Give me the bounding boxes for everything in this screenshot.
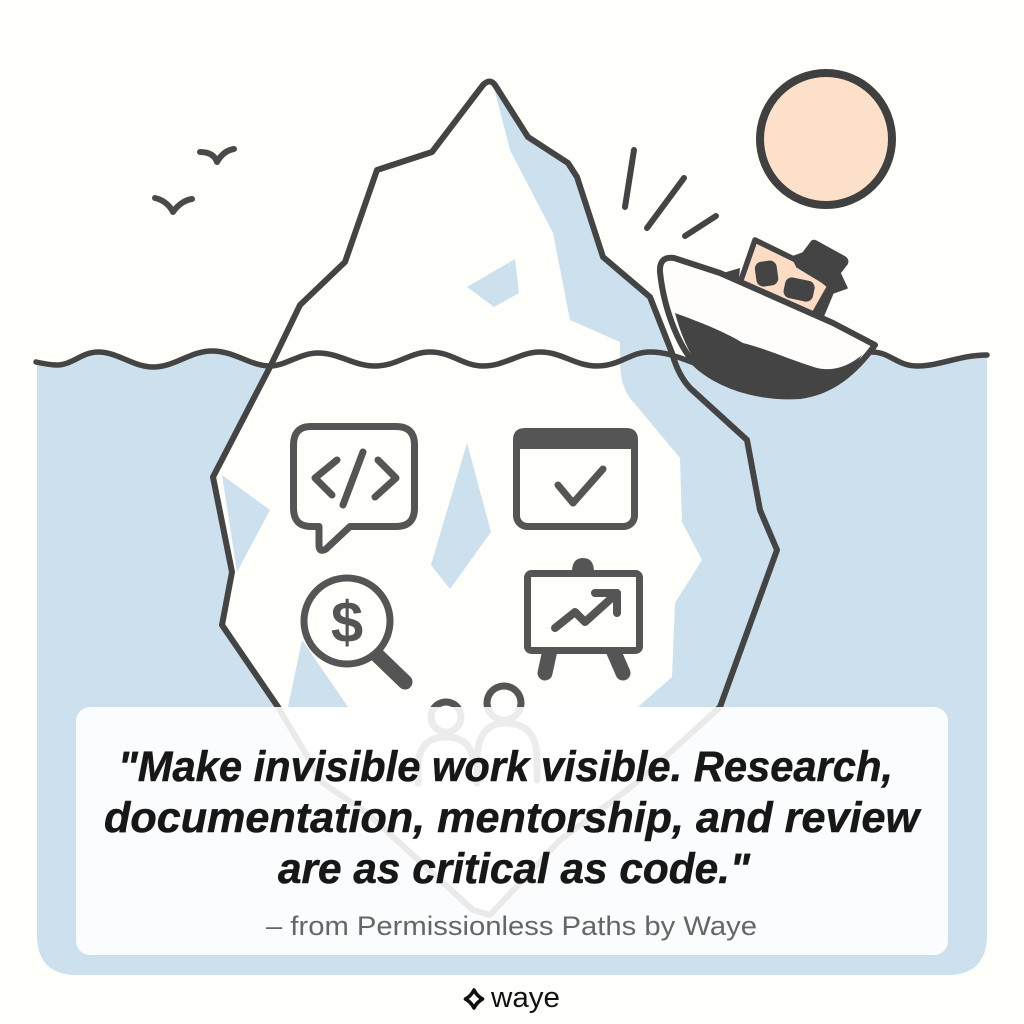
check mark	[558, 469, 603, 503]
iceberg facet left	[222, 475, 270, 572]
calendar header	[513, 428, 638, 449]
boat cabin	[740, 240, 830, 316]
bird upper	[200, 149, 234, 162]
icon: calendar check	[513, 428, 638, 526]
impact line 2	[647, 178, 684, 228]
logo wordmark: waye	[490, 982, 560, 1014]
logo diamond	[466, 990, 482, 1008]
bubble outline	[294, 426, 414, 550]
boat funnel	[792, 240, 848, 317]
magnifier lens	[304, 578, 390, 664]
board frame	[528, 574, 640, 650]
boat hull dark band	[675, 313, 862, 396]
growth arrow	[555, 593, 617, 628]
water	[37, 351, 987, 975]
boat	[660, 240, 875, 396]
attribution: – from Permissionless Paths by Waye	[266, 911, 757, 941]
board clip	[572, 558, 594, 572]
quote text	[104, 743, 922, 893]
boat hull	[660, 258, 875, 396]
iceberg outline	[213, 82, 777, 915]
card panel	[76, 707, 948, 955]
code symbol	[315, 452, 396, 505]
icon: people	[418, 686, 537, 783]
board legs	[545, 650, 623, 673]
magnifier handle	[377, 655, 405, 682]
iceberg shaded side	[494, 88, 777, 707]
iceberg facet bottom left	[288, 640, 348, 707]
impact lines	[625, 150, 716, 236]
waterline	[36, 351, 987, 367]
bird lower	[155, 198, 192, 212]
quote text: documentation, mentorship, and review	[104, 794, 922, 842]
logo	[466, 982, 560, 1014]
person right	[477, 686, 537, 783]
calendar frame	[516, 432, 634, 526]
impact line 1	[625, 150, 634, 207]
iceberg facet top	[467, 259, 519, 307]
quote card	[76, 707, 948, 955]
boat deck wedge	[723, 268, 740, 290]
iceberg body fill	[213, 80, 777, 915]
person left	[418, 702, 473, 783]
birds	[155, 149, 234, 212]
boat window right	[782, 276, 816, 303]
iceberg	[213, 80, 777, 915]
impact line 3	[685, 216, 716, 236]
quote text: "Make invisible work visible. Research,	[118, 743, 893, 791]
icon: sun	[760, 73, 892, 205]
dollar sign: $	[331, 590, 363, 655]
icon: presentation board	[528, 558, 640, 673]
quote text: are as critical as code."	[278, 845, 751, 893]
boat window left	[754, 260, 779, 287]
icon: dollar magnifier	[304, 578, 405, 682]
iceberg facet centre	[431, 443, 491, 589]
icon: code speech bubble	[294, 426, 414, 550]
